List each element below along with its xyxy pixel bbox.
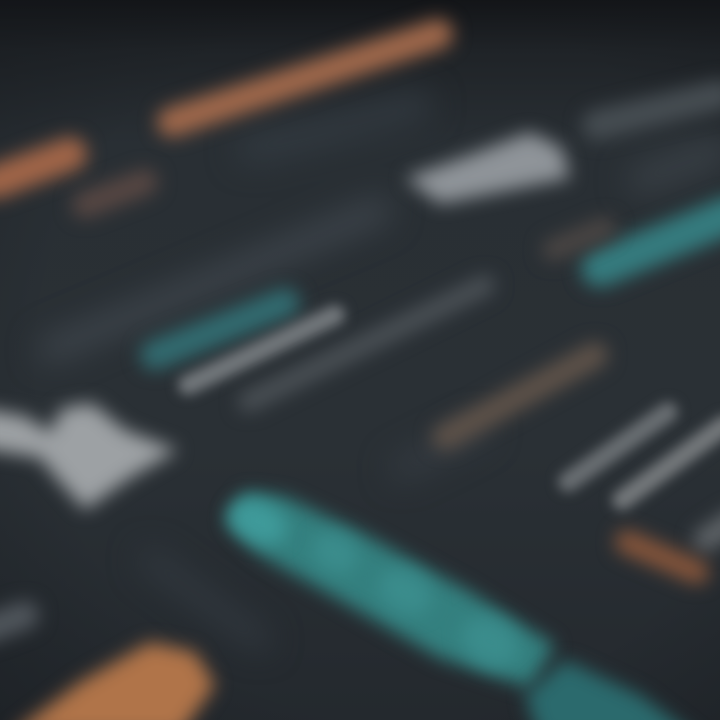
- teal bar: large lower: [225, 492, 555, 688]
- orange bar: bottom left: [10, 642, 215, 720]
- grey bar: middle light: [188, 315, 335, 385]
- white blob: left: [0, 403, 178, 510]
- grey bar: middle long: [248, 285, 485, 402]
- orange bar: top: [172, 34, 438, 122]
- orange bar: upper left: [0, 154, 70, 182]
- brown bar: right faint: [553, 228, 605, 250]
- grey bar: bottom left: [0, 615, 25, 630]
- faint background stripes: [50, 105, 720, 640]
- grey bar: top right: [597, 95, 720, 125]
- grey bar: lower right two: [622, 425, 720, 500]
- grey bar: far right: [705, 520, 720, 540]
- orange bar: lower right: [627, 542, 697, 572]
- white blob: upper centre: [405, 132, 570, 204]
- brown bar: centre right: [445, 355, 595, 437]
- teal bar: lower right continuation: [525, 660, 700, 720]
- teal bar: middle: [155, 303, 285, 355]
- grey bar: lower right one: [568, 412, 668, 482]
- teal mottling: band segments: [305, 525, 527, 676]
- teal highlight: band start: [222, 491, 294, 553]
- brown bar: upper left faint: [85, 182, 145, 205]
- teal bar: right: [600, 215, 720, 268]
